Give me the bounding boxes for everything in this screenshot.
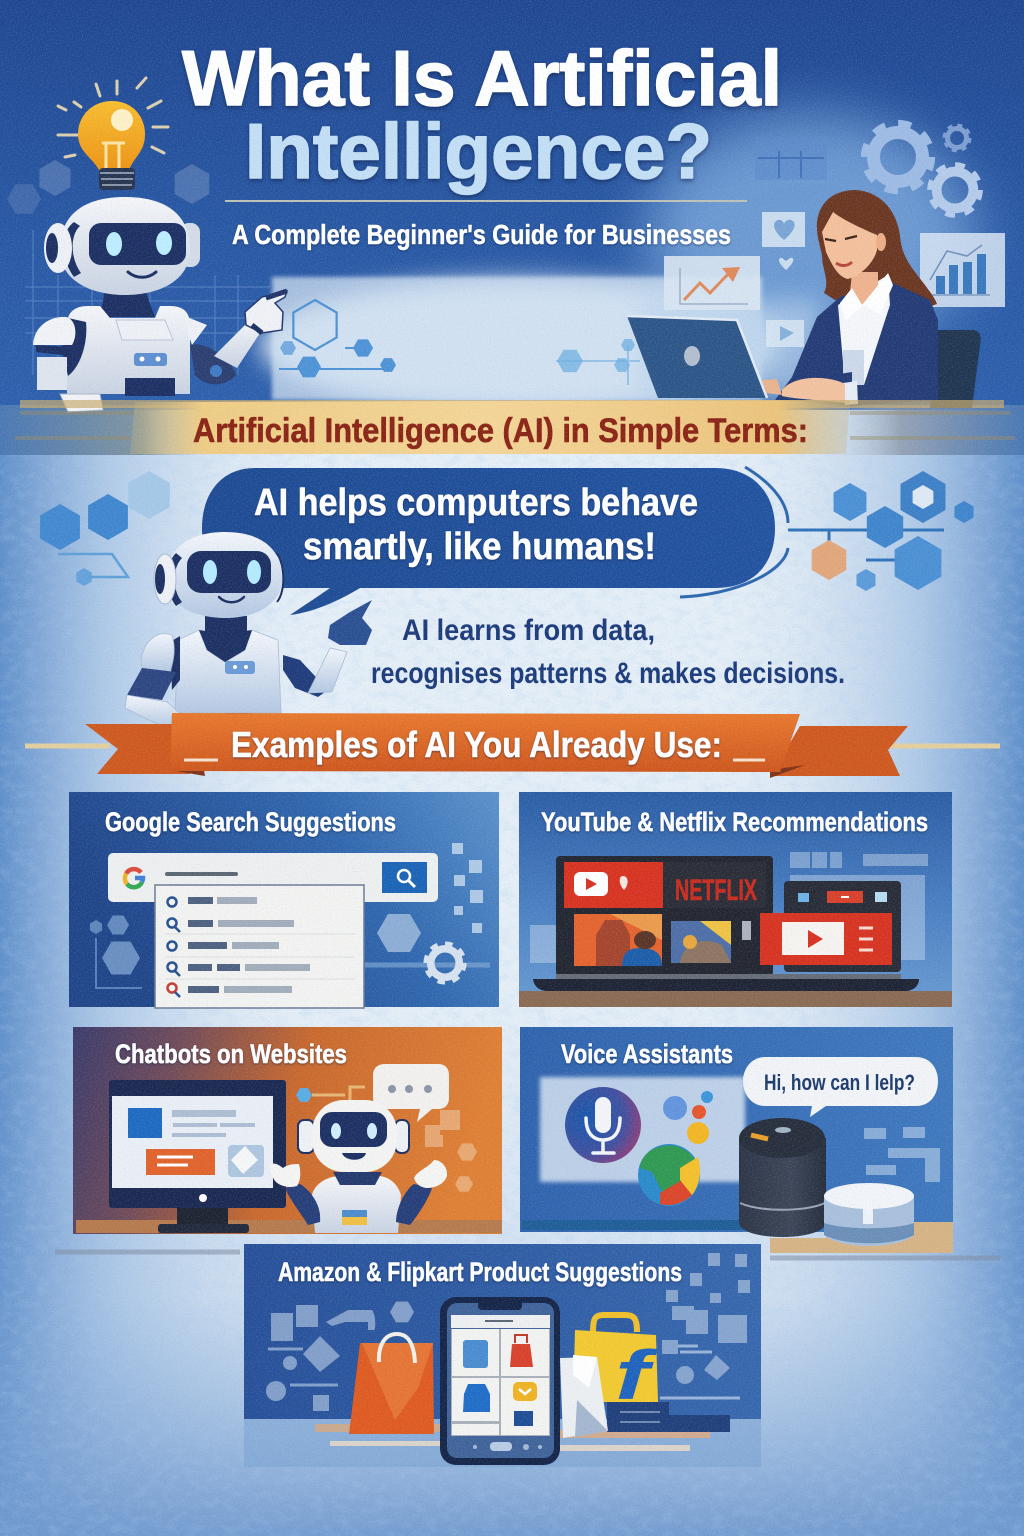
speech bubble: main message: smartly, like humans! [303,526,656,568]
panel: chatbots on websites [73,1027,502,1234]
search bar [108,853,438,902]
icon: light bulb [58,78,168,190]
panel: youtube and netflix recommendations [519,792,952,1007]
suggestion dropdown [155,885,364,1008]
banner: simple terms: Artificial Intelligence (AI) in Simple Terms: [193,412,808,450]
panel decorative blocks [864,1127,940,1182]
ribbon: examples heading: Examples of AI You Already Use: [231,724,722,765]
tan desk surface [770,1222,953,1253]
title [182,34,782,195]
panel title: Amazon & Flipkart Product Suggestions [278,1257,682,1287]
laptop screen with streaming tiles [556,856,773,976]
right business icons: gears, cards, charts [664,124,1005,347]
laptop base and wooden shelf [519,974,952,1007]
chair [930,330,981,408]
strip shadow under panel [55,1252,1000,1258]
explanatory text: AI learns from data, [402,614,655,647]
panel title: Voice Assistants [561,1039,733,1069]
robot: pointing figure in middle [125,532,372,737]
hexagon network left [40,471,170,586]
laptop screen with streaming tiles: NETFLIX [675,874,757,907]
microphone icon [565,1087,641,1163]
robot: pointing figure at top left [33,197,287,412]
second screen [784,881,901,972]
header backdrop [0,0,1024,455]
banner: simple terms [15,400,1015,454]
panel: amazon and flipkart product suggestions [244,1244,761,1467]
panel title: Chatbots on Websites [115,1039,347,1069]
yellow flipkart bag [573,1315,659,1414]
title: What Is Artificial [182,34,782,122]
assistant dots and colour ring [638,1091,713,1206]
panel decorative shapes [266,1253,750,1411]
lower mottled ledge [244,1419,761,1467]
speech bubble: Hi, how can I lelp? [764,1070,915,1095]
yellow flipkart bag: f [615,1336,659,1414]
businesswoman at laptop [762,190,938,406]
red video card [760,913,892,965]
title: Intelligence? [245,107,712,195]
small round speaker [824,1183,914,1246]
speech bubble with dots [373,1064,449,1122]
ribbon: examples heading [25,713,1000,778]
explanatory text [371,614,845,690]
desk [76,1220,502,1233]
panel background blocks [530,852,928,963]
left circuit grid and hexagons [7,160,640,385]
panel title: YouTube & Netflix Recommendations [541,807,928,837]
dark box beneath bag [607,1402,730,1432]
laptop [627,316,767,398]
panel title: Google Search Suggestions [105,807,396,837]
speech bubble: main message: AI helps computers behave [254,482,698,524]
panel: google search suggestions [69,792,499,1008]
panel decoration: hexagons, gear and squares [90,843,490,988]
panel decorative blocks [425,1110,477,1192]
speech bubble: main message [202,467,788,615]
smartphone with product grid [440,1297,560,1465]
orange shopping bag [349,1334,434,1434]
explanatory text: recognises patterns & makes decisions. [371,657,845,690]
monitor [109,1080,286,1233]
speech bubble [743,1057,938,1117]
hexagon network right [788,471,974,591]
smart speaker [739,1118,826,1237]
light interface area [540,1077,745,1182]
chatbot robot [270,1087,447,1233]
panel: voice assistants [55,1027,1000,1258]
subtitle: A Complete Beginner's Guide for Businesses [232,219,731,250]
white envelope [560,1355,608,1438]
